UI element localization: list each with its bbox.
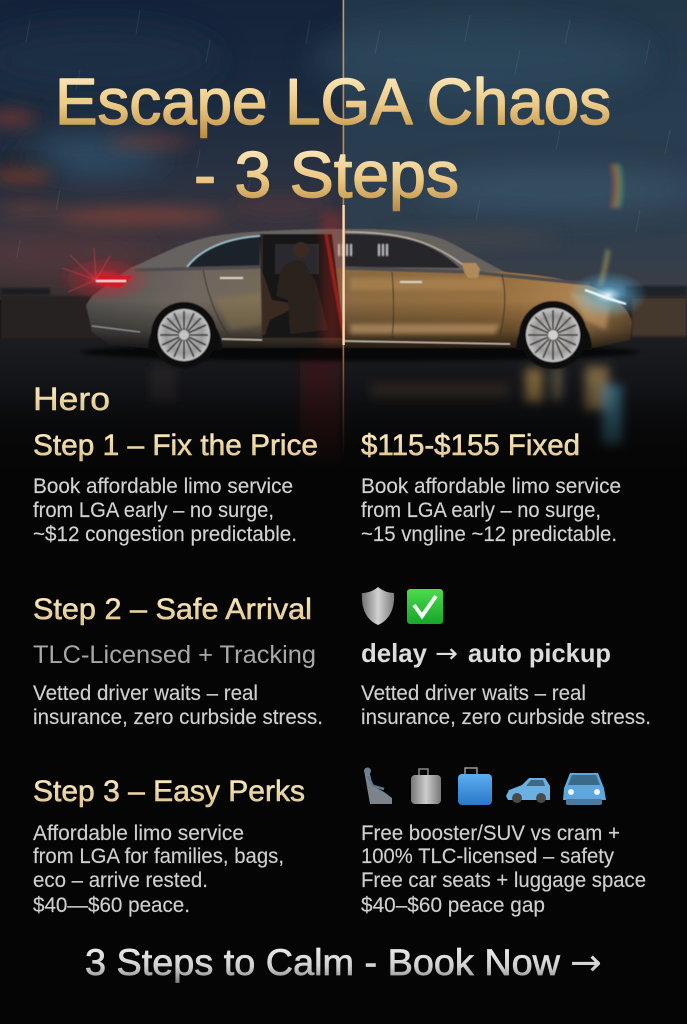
text block: price body: Book affordable limo service: [361, 475, 621, 498]
subheading: delay to auto pickup: auto pickup: [468, 638, 611, 668]
text block: perks body: Free car seats + luggage space: [361, 869, 646, 892]
panel: step 3 left: [33, 775, 305, 917]
door seams: [203, 234, 505, 340]
text block: step 1 body: from LGA early – no surge,: [33, 499, 274, 522]
call to action: →: [570, 941, 602, 984]
subheading: delay to auto pickup: →: [435, 639, 458, 669]
panel: step 1 left: [33, 429, 318, 546]
heading: step 1: Step 1 – Fix the Price: [33, 429, 318, 462]
icon: grey suitcase: [411, 769, 441, 804]
panel: step 3 right: [361, 768, 646, 917]
text block: perks body: $40–$60 peace gap: [361, 894, 545, 917]
subheading: licensed: TLC-Licensed + Tracking: [33, 641, 316, 669]
tail light: [61, 248, 148, 301]
text block: price body: from LGA early – no surge,: [361, 499, 601, 522]
headlight: [570, 272, 646, 318]
door edge red: [326, 234, 344, 338]
text block: step 2 body: Vetted driver waits – real: [33, 682, 258, 705]
limousine: [57, 229, 648, 369]
subheading: delay to auto pickup: [361, 638, 611, 669]
text block: step 3 body: $40—$60 peace.: [33, 894, 190, 917]
title: Escape LGA Chaos: [55, 65, 611, 138]
text block: price body: [361, 475, 621, 546]
text block: step 3 body: [33, 822, 284, 917]
text block: step 2 body: insurance, zero curbside stress.: [33, 706, 323, 729]
text block: step 2 body: [33, 682, 323, 729]
hero scene: stormy sky split: [0, 0, 687, 480]
rain streaks: [17, 10, 670, 258]
title: [55, 65, 611, 211]
door handles: [220, 278, 422, 282]
open door interior: [260, 234, 344, 338]
text block: driver body: [361, 682, 651, 729]
icon: blue suitcase: [458, 768, 492, 805]
panel: step 2 right: [361, 587, 651, 729]
icon: small blue car: [506, 778, 550, 803]
icon: green check: [407, 589, 443, 624]
heading: fixed price: $115-$155 Fixed: [361, 429, 580, 462]
section label: Hero: Hero: [33, 381, 110, 417]
heading: step 3: Step 3 – Easy Perks: [33, 775, 305, 808]
text block: step 1 body: ~$12 congestion predictable.: [33, 523, 297, 546]
subheading: delay to auto pickup: delay: [361, 638, 428, 668]
text block: perks body: [361, 822, 646, 917]
car shadow: [80, 343, 640, 361]
wheel arches: [147, 328, 222, 350]
text block: step 3 body: Affordable limo service: [33, 822, 244, 845]
mirror: [462, 263, 480, 278]
text block: driver body: Vetted driver waits – real: [361, 682, 586, 705]
car body: [86, 259, 632, 348]
wheel: rear: [151, 302, 217, 368]
icon: shield: [362, 587, 394, 625]
icon: seat: [364, 768, 392, 804]
lens flare: rainbow: [600, 164, 622, 286]
centre split line: [343, 0, 344, 460]
cabin light bars: [339, 244, 387, 256]
sill line: [222, 339, 510, 344]
heading: step 2: Step 2 – Safe Arrival: [33, 593, 312, 626]
passenger: [276, 260, 328, 334]
wet ground: [0, 338, 687, 422]
text block: perks body: 100% TLC-licensed – safety: [361, 845, 614, 868]
text block: step 3 body: eco – arrive rested.: [33, 869, 208, 892]
call to action: 3 Steps to Calm - Book Now: [85, 942, 560, 983]
windows: [187, 236, 260, 267]
text block: perks body: Free booster/SUV vs cram +: [361, 822, 620, 845]
text block: step 1 body: [33, 475, 297, 546]
text block: price body: ~15 vngline ~12 predictable.: [361, 523, 617, 546]
panel: step 1 right: [361, 429, 621, 546]
horizon: [0, 296, 687, 340]
title: - 3 Steps: [194, 138, 459, 211]
panel: step 2 left: [33, 593, 323, 729]
wheel: front: [519, 301, 587, 369]
belt line: [135, 267, 590, 284]
red glow at split: [322, 212, 342, 344]
fade to black: [296, 388, 630, 469]
text block: step 1 body: Book affordable limo service: [33, 475, 293, 498]
text block: step 3 body: from LGA for families, bags,: [33, 845, 284, 868]
body highlights: [215, 278, 610, 334]
icon: front blue car: [563, 773, 606, 805]
roof and upper tone: [132, 229, 505, 272]
text block: driver body: insurance, zero curbside stress.: [361, 706, 651, 729]
